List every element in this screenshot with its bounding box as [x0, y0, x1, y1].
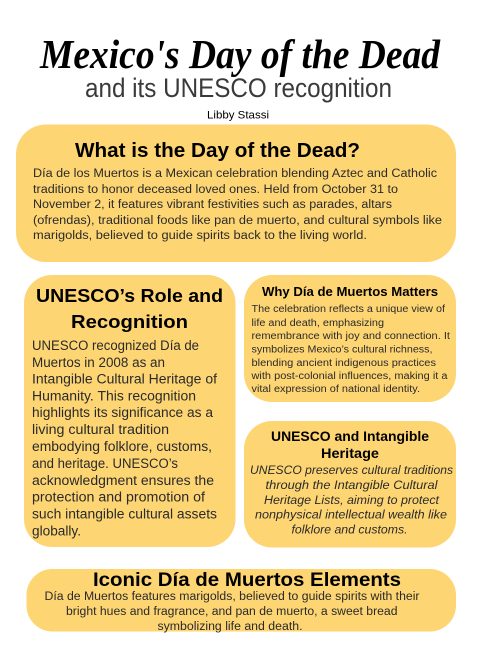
- text block: why it matters: symbolizes Mexico’s cultural richness,: [252, 344, 432, 356]
- text block: iconic elements: symbolizing life and death.: [158, 621, 302, 633]
- text block: UNESCO's recognition: such intangible cultural assets: [32, 506, 217, 522]
- text block: definition: November 2, it features vibrant festivities such as parades, altars: [33, 199, 392, 211]
- panel: UNESCO and intangible heritage: [244, 421, 456, 548]
- title: Mexico's Day of the Dead: [39, 31, 440, 77]
- panel: iconic Día de Muertos elements: [26, 569, 456, 633]
- text block: why it matters: blending ancient indigenous practices: [252, 358, 436, 369]
- text block: why it matters: The celebration reflects a unique view of: [252, 304, 445, 315]
- text block: intangible heritage: UNESCO preserves cultural traditions: [250, 465, 453, 477]
- heading: what is the Day of the Dead: What is the Day of the Dead?: [75, 140, 360, 162]
- text block: why it matters: life and death, emphasizing: [252, 318, 384, 329]
- text block: definition: Día de los Muertos is a Mexican celebration blending Aztec and Catholic: [33, 168, 437, 180]
- panel: what is the Day of the Dead: [16, 124, 456, 262]
- text block: intangible heritage: Heritage Lists, aiming to protect: [264, 495, 440, 507]
- text block: why it matters: with post-colonial influences, making it a: [250, 371, 448, 382]
- text block: UNESCO's recognition: globally.: [32, 524, 81, 538]
- text block: intangible heritage: through the Intangible Cultural: [266, 480, 438, 492]
- text block: UNESCO's recognition: protection and promotion of: [32, 490, 205, 504]
- text block: UNESCO's recognition: Intangible Cultural Heritage of: [32, 372, 217, 386]
- panel: why Día de Muertos matters: [244, 275, 456, 402]
- text block: UNESCO's recognition: highlights its significance as a: [32, 405, 213, 420]
- text block: UNESCO's recognition: embodying folklore, customs,: [32, 439, 212, 454]
- text block: UNESCO's recognition: UNESCO recognized Día de: [32, 338, 199, 353]
- heading: UNESCO's role: UNESCO’s Role and: [36, 285, 223, 306]
- text block: intangible heritage: nonphysical intellectual wealth like: [255, 510, 447, 522]
- heading: UNESCO's role: [36, 285, 223, 332]
- text block: UNESCO's recognition: Muertos in 2008 as an: [32, 355, 165, 370]
- heading: UNESCO and intangible heritage: Heritage: [321, 446, 380, 461]
- text block: intangible heritage: [250, 465, 453, 536]
- text block: definition: marigolds, believed to guide spirits back to the living world.: [33, 230, 367, 242]
- text block: why it matters: [250, 304, 450, 395]
- text block: intangible heritage: folklore and customs.: [292, 524, 408, 536]
- text block: UNESCO's recognition: Humanity. This recognition: [32, 388, 196, 404]
- heading: UNESCO and intangible heritage: [271, 429, 430, 461]
- subtitle: and its UNESCO recognition: [85, 73, 392, 103]
- text block: iconic elements: Día de Muertos features marigolds, believed to guide spirits with their: [44, 591, 420, 603]
- author: Libby Stassi: [207, 110, 269, 122]
- heading: iconic elements: Iconic Día de Muertos Elements: [93, 570, 401, 591]
- text block: UNESCO's recognition: [32, 338, 217, 538]
- text block: iconic elements: [44, 591, 420, 633]
- text block: definition: traditions to honor deceased loved ones. Held from October 31 to: [33, 184, 398, 196]
- heading: UNESCO's role: Recognition: [71, 311, 188, 332]
- text block: UNESCO's recognition: acknowledgment ensures the: [32, 473, 214, 488]
- text block: why it matters: remembrance with joy and connection. It: [252, 331, 450, 342]
- panel: UNESCO's role and recognition: [24, 275, 236, 547]
- text block: why it matters: vital expression of national identity.: [252, 384, 420, 395]
- text block: iconic elements: bright hues and fragrance, and pan de muerto, a sweet bread: [66, 606, 398, 618]
- text block: definition: (ofrendas), traditional foods like pan de muerto, and cultural symbols like: [33, 215, 442, 227]
- text block: definition: [33, 168, 442, 242]
- heading: UNESCO and intangible heritage: UNESCO and Intangible: [271, 429, 430, 444]
- text block: UNESCO's recognition: and heritage. UNESCO’s: [32, 456, 178, 471]
- text block: UNESCO's recognition: living cultural tradition: [32, 422, 169, 437]
- heading: why it matters: Why Día de Muertos Matters: [262, 285, 438, 299]
